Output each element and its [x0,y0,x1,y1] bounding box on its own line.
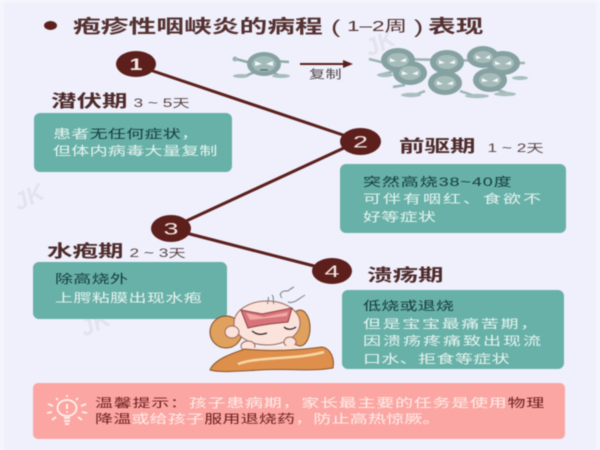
panel text line 3: 好等症状 [363,210,436,224]
step 2 marker: 2 [353,132,368,152]
panel: 潜伏期 [34,113,232,172]
icon: light bulb [46,394,88,426]
title duration: 1–2周 [347,18,407,35]
watermark: JK [361,25,400,62]
icon: single virus [232,52,290,78]
illustration: feverish child in bed [208,286,335,373]
title [43,16,484,38]
hands [241,341,255,351]
icon: replication arrow [299,60,354,68]
panel: 前驱期 [340,164,566,233]
heading: 前驱期: 前驱期 1 ~ 2天 [399,137,544,156]
label: 复制: 复制 [309,69,342,81]
panel text line 2: 上腭粘膜出现水疱 [55,291,202,305]
title bracket close: ) [414,16,423,37]
head [234,301,300,345]
blanket [210,347,333,372]
tip line 1: 温馨提示：孩子患病期，家长最主要的任务是使用物理 [95,396,545,410]
towel [241,308,292,328]
watermark: JK [76,305,115,342]
title bullet [44,21,57,30]
panel text line 4: 口水、拒食等症状 [363,352,510,366]
panel text line 3: 因溃疡疼痛致出现流 [363,334,543,348]
step 1 marker: 1 [130,55,142,74]
panel: 水疱期 [33,262,227,319]
heading: 水疱期: 水疱期 2 ~ 3天 [47,242,186,261]
step 4 marker [311,257,353,285]
panel text line 1: 低烧或退烧 [363,299,454,313]
panel text line 2: 但体内病毒大量复制 [53,144,218,158]
title text: 疱疹性咽峡炎的病程 [73,16,323,37]
tip line 2: 降温或给孩子服用退烧药，防止高热惊厥。 [95,412,441,426]
panel text line 1: 除高烧外 [55,272,128,286]
step 3 marker: 3 [164,220,178,238]
icon: multiplied viruses [368,46,528,99]
watermark: JK [10,179,49,216]
eyes [252,327,296,334]
pillow [210,316,242,348]
step 3 marker [150,214,192,243]
panel text line 1: 突然高烧38~40度 [363,175,513,189]
step 1 marker [115,50,157,78]
tip panel [33,383,565,439]
panel text line 2: 但是宝宝最痛苦期， [363,317,540,331]
heading: 潜伏期: 潜伏期 3 ~ 5天 [51,92,190,111]
title bracket open: ( [331,16,340,37]
heading: 溃疡期: 溃疡期 [367,266,444,285]
step 2 marker [339,127,382,156]
fever steam [267,287,305,304]
title text end: 表现 [428,16,484,37]
panel: 溃疡期 [342,290,564,369]
step 4 marker: 4 [324,262,340,281]
panel text line 1: 患者无任何症状， [53,127,199,141]
panel text line 2: 可伴有咽红、食欲不 [363,192,543,206]
